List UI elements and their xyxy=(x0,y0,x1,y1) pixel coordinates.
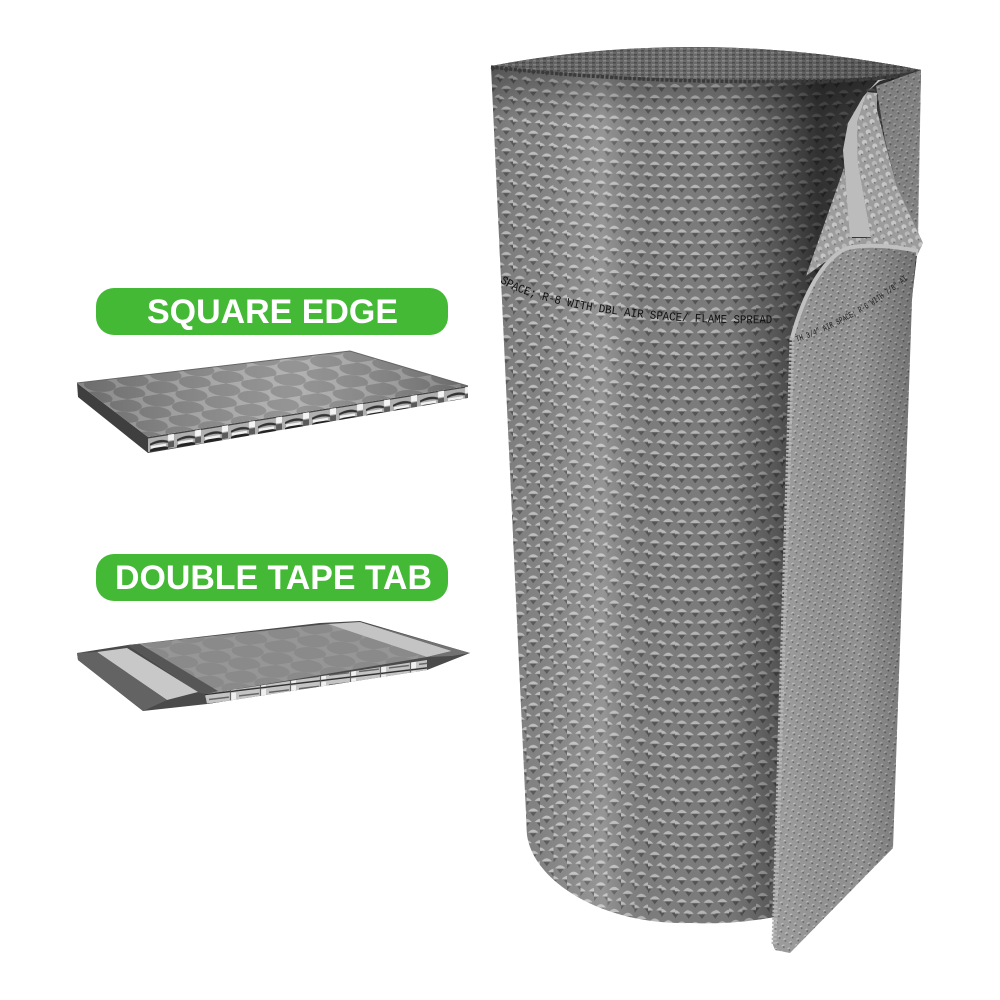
roll body with bubble texture xyxy=(491,47,921,924)
insulation roll xyxy=(490,47,923,953)
pill label: double tape tab: DOUBLE TAPE TAB xyxy=(115,559,432,597)
adhesive tape strip xyxy=(843,79,887,237)
flap left edge xyxy=(774,338,792,945)
pill label: square edge: SQUARE EDGE xyxy=(147,293,398,331)
printed text on the flap: TH 3/4" AIR SPACE; R-6 WITH 7/8" AI xyxy=(795,275,908,342)
front wrap of the roll xyxy=(773,247,916,953)
folded flap with bubble back xyxy=(857,92,923,256)
flap top edge xyxy=(792,246,918,338)
rim of the top face xyxy=(491,67,921,81)
printed text on the roll: SPACE; R-8 WITH DBL AIR SPACE/ FLAME SPREAD xyxy=(500,276,772,324)
top face of the roll xyxy=(491,47,921,80)
product sample: square edge panel xyxy=(77,351,468,453)
upper right of the roll behind the flap xyxy=(876,70,921,250)
flap shading xyxy=(773,247,916,953)
top face shading xyxy=(491,47,921,80)
inner face beside the tape xyxy=(806,168,895,276)
product sample: double tape tab panel xyxy=(77,621,470,711)
pill label: square edge xyxy=(96,288,448,335)
